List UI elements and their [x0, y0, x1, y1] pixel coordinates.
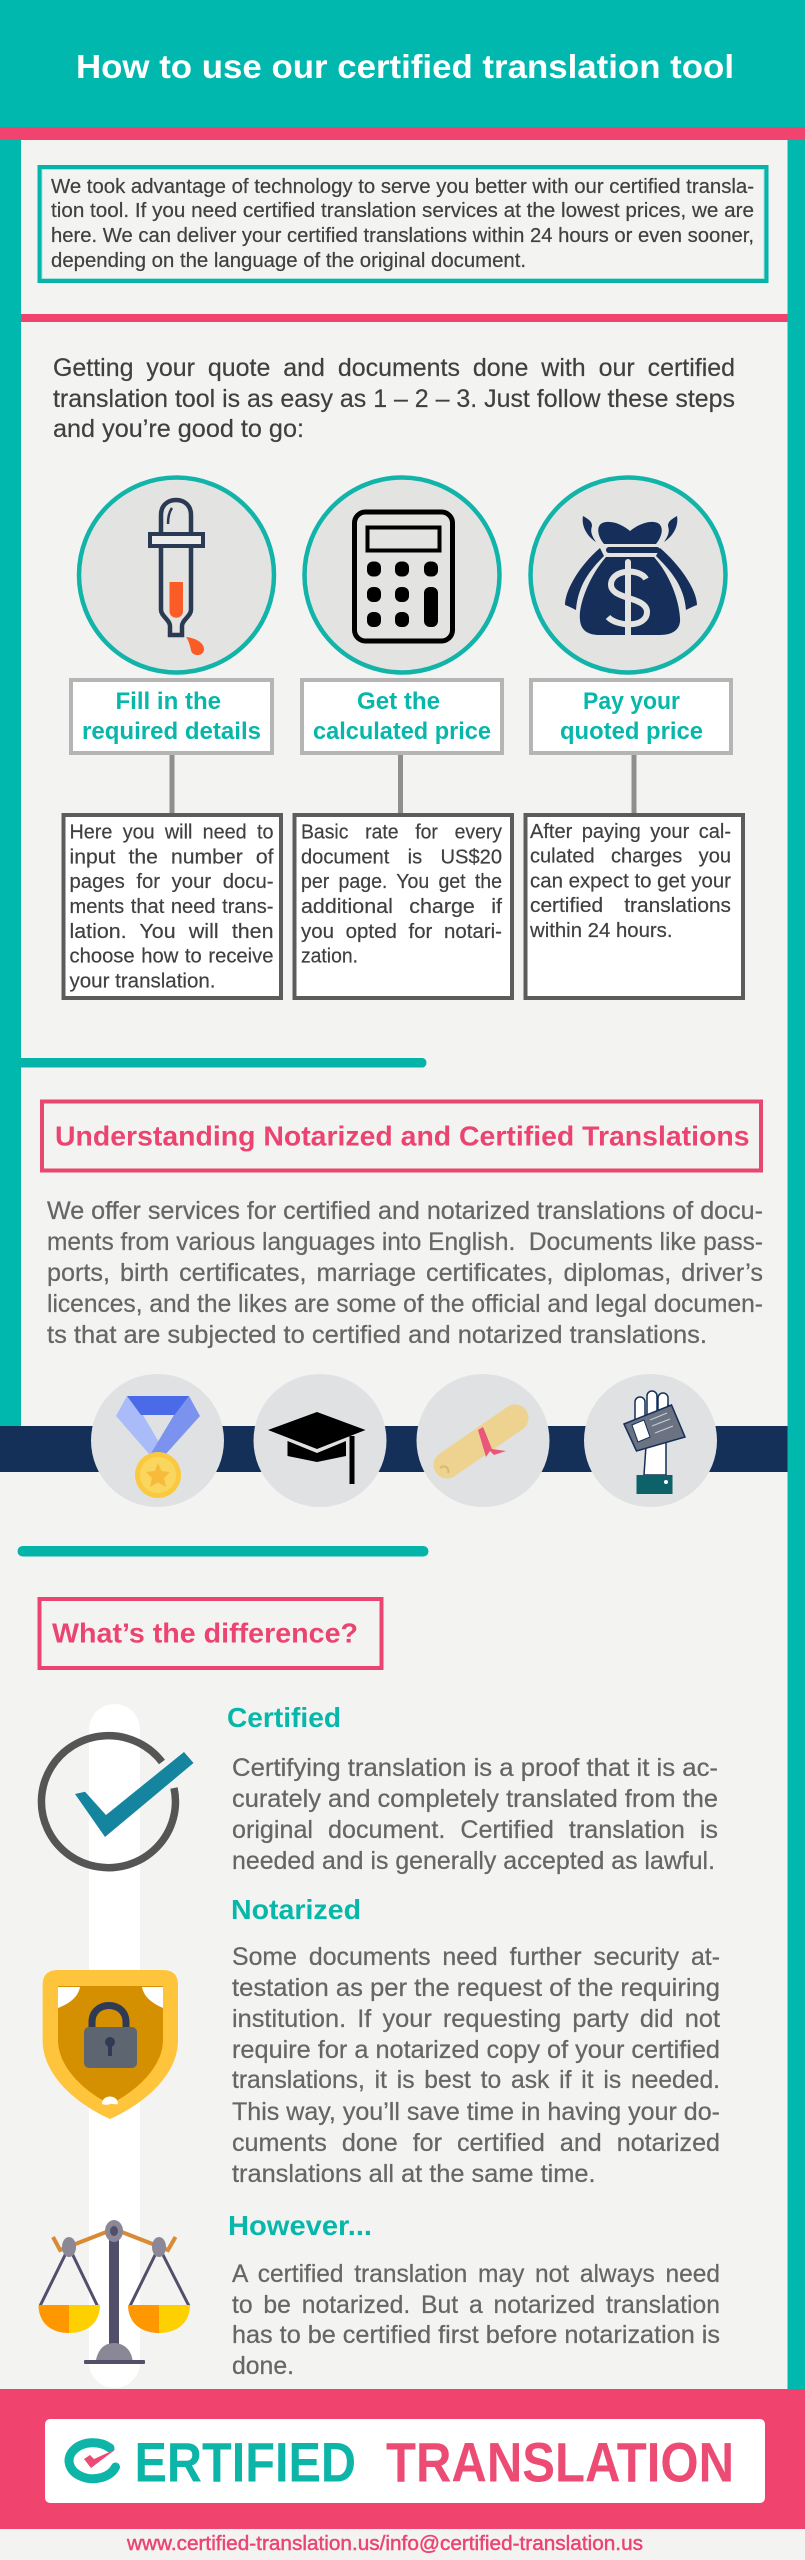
step 3: pay your quoted price	[526, 478, 743, 998]
description: fill in details: your translation.	[70, 970, 216, 992]
section: notarized: testation as per the request of the requiring	[232, 1974, 720, 2002]
icon: graduation cap	[254, 1374, 386, 1507]
text block: services description: ports, birth certificates, marriage certificates, diplomas, driver’s	[47, 1259, 763, 1287]
section: however: to be notarized. But a notarized translation	[232, 2291, 720, 2319]
section: notarized: translations all at the same time.	[232, 2160, 596, 2188]
section: however	[228, 2210, 720, 2380]
icon: medal	[91, 1374, 224, 1507]
section: notarized: cuments done for certified and notarized	[232, 2129, 720, 2157]
label: get the calculated price: Get the	[357, 688, 440, 715]
label: pay your quoted price	[531, 680, 731, 753]
section: certified: Certified	[227, 1702, 341, 1733]
section: notarized: Notarized	[231, 1894, 361, 1925]
section: notarized: translations, it is best to ask if it is needed.	[232, 2066, 720, 2094]
icon: security shield with padlock	[43, 1970, 178, 2119]
panel: intro text box: We took advantage of technology to serve you better with our certified transla-	[51, 176, 754, 198]
label: pay your quoted price: quoted price	[560, 718, 703, 745]
label: pay your quoted price: Pay your	[583, 688, 680, 715]
section: however: A certified translation may not always need	[232, 2260, 720, 2288]
description: calculated price: Basic rate for every	[301, 820, 503, 844]
description: fill in details: lation. You will then	[70, 920, 274, 943]
section: certified	[227, 1702, 718, 1875]
label: get the calculated price	[302, 680, 502, 753]
text block: services description: ments from various languages into English. Documents like pass-	[47, 1228, 763, 1256]
panel: intro text box	[40, 167, 766, 281]
description: fill in details: choose how to receive	[70, 944, 274, 968]
icon: money bag	[530, 478, 726, 672]
description: calculated price	[294, 815, 512, 998]
text block: services description: licences, and the likes are some of the official and legal documen-	[47, 1290, 763, 1318]
logo wordmark: translation: TRANSLATION	[386, 2430, 734, 2494]
description: fill in details: pages for your docu-	[70, 870, 274, 893]
label: fill in the required details: required details	[82, 718, 261, 745]
description: fill in details: ments that need trans-	[70, 895, 274, 918]
document icons band	[0, 1374, 788, 1507]
section: notarized: Some documents need further security at-	[232, 1943, 720, 1971]
description: pay quoted price: can expect to get your	[530, 870, 731, 892]
footer contact line: www.certified-translation.us/info@certified-translation.us	[126, 2533, 643, 2555]
step 2: get the calculated price	[294, 478, 512, 998]
icon: hand holding ID card	[584, 1374, 717, 1507]
description: pay quoted price: After paying your cal-	[530, 820, 731, 843]
section: notarized: This way, you’ll save time in having your do-	[232, 2098, 720, 2126]
description: pay quoted price: within 24 hours.	[529, 919, 672, 942]
icon: diploma scroll	[416, 1374, 550, 1507]
description: calculated price: document is US$20	[301, 846, 502, 868]
description: fill in details: Here you will need to	[70, 820, 274, 844]
text block: steps introduction: translation tool is as easy as 1 – 2 – 3. Just follow these steps	[53, 385, 735, 413]
description: calculated price: zation.	[301, 944, 358, 968]
section: certified: curately and completely translated from the	[232, 1785, 718, 1813]
heading: what's the difference	[40, 1599, 382, 1668]
section: notarized: require for a notarized copy of your certified	[232, 2036, 720, 2064]
description: calculated price: additional charge if	[301, 895, 502, 918]
section: certified: needed and is generally accepted as lawful.	[232, 1847, 715, 1875]
description: fill in details: input the number of	[70, 846, 274, 868]
section: certified: Certifying translation is a proof that it is ac-	[232, 1754, 718, 1782]
text block: services description: ts that are subjected to certified and notarized translations.	[47, 1321, 707, 1349]
panel: intro text box: tion tool. If you need certified translation services at the lowest prices, we are	[51, 200, 754, 222]
title: How to use our certified translation tool	[76, 48, 734, 85]
icon: logo check C	[69, 2443, 116, 2479]
section: however: However...	[228, 2210, 372, 2241]
panel: intro text box: here. We can deliver your certified translations within 24 hours or even sooner,	[51, 225, 754, 247]
description: pay quoted price: certified translations	[530, 894, 731, 917]
heading: understanding notarized and certified translations	[42, 1102, 761, 1170]
section: however: done.	[232, 2352, 294, 2380]
step 1: fill in the required details	[64, 478, 281, 998]
panel: intro text box: depending on the language of the original document.	[51, 250, 526, 272]
section: notarized	[231, 1894, 720, 2188]
heading: understanding notarized and certified translations: Understanding Notarized and Certified Translations	[55, 1120, 750, 1152]
description: calculated price: per page. You get the	[301, 870, 502, 893]
icon: check mark in circle	[41, 1736, 194, 1868]
text block: services description: We offer services for certified and notarized translations of docu-	[47, 1197, 763, 1225]
label: fill in the required details	[71, 680, 272, 753]
icon: dropper	[79, 478, 274, 672]
header banner	[0, 0, 805, 140]
text block: services description	[47, 1197, 763, 1349]
label: get the calculated price: calculated price	[313, 718, 491, 745]
icon: calculator	[304, 478, 500, 672]
description: fill in details	[64, 815, 281, 998]
text block: steps introduction: Getting your quote and documents done with our certified	[53, 354, 735, 382]
logo wordmark: certified: ERTIFIED	[134, 2430, 356, 2494]
text block: steps introduction: and you’re good to go:	[53, 415, 304, 443]
description: pay quoted price	[526, 815, 743, 998]
icon: balance scales	[38, 2220, 190, 2364]
text block: steps introduction	[53, 354, 735, 443]
heading: what's the difference: What’s the difference?	[52, 1618, 358, 1648]
footer logo banner	[0, 2389, 805, 2529]
section: notarized: institution. If your requesting party did not	[232, 2005, 720, 2033]
description: pay quoted price: culated charges you	[530, 844, 731, 868]
section: however: has to be certified first before notarization is	[232, 2321, 720, 2349]
label: fill in the required details: Fill in the	[116, 688, 221, 715]
description: calculated price: you opted for notari-	[301, 920, 502, 943]
section: certified: original document. Certified translation is	[232, 1816, 718, 1844]
